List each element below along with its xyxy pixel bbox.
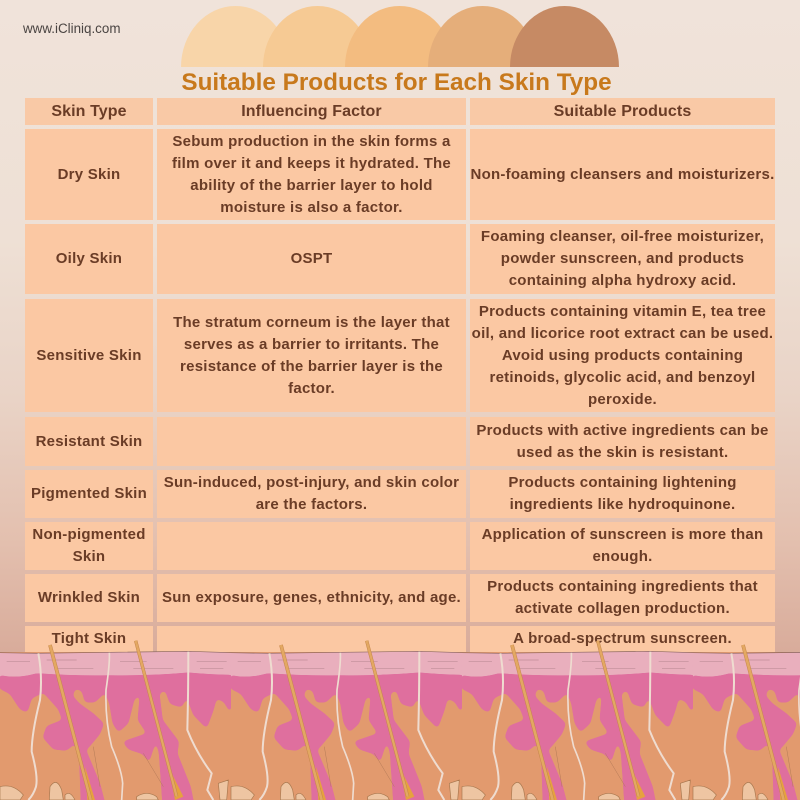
row: wrinkled skin type [25, 574, 153, 622]
row: tight skin type [25, 626, 153, 652]
row: sensitive skin factor [157, 299, 466, 412]
row: pigmented skin products: ingredients like hydroquinone. [510, 496, 735, 513]
row: pigmented skin factor [157, 470, 466, 518]
row: sensitive skin products: Avoid using products containing [502, 346, 743, 364]
row: sensitive skin factor: factor. [288, 380, 335, 396]
row: non-pigmented skin type [25, 522, 153, 570]
row: sensitive skin type: Sensitive Skin [36, 346, 142, 364]
header: influencing factor: Influencing Factor [241, 102, 382, 120]
row: non-pigmented skin products [470, 522, 775, 570]
row: pigmented skin products: Products containing lightening [508, 474, 737, 491]
row: wrinkled skin products: Products containing ingredients that [487, 578, 758, 595]
row: pigmented skin type [25, 470, 153, 518]
website label: www.iCliniq.com [23, 21, 120, 36]
row: dry skin factor [157, 129, 466, 220]
row: oily skin products: Foaming cleanser, oil-free moisturizer, [481, 228, 764, 245]
row: dry skin type [25, 129, 153, 220]
header: suitable products: Suitable Products [554, 102, 691, 120]
row: sensitive skin factor: serves as a barrier to irritants. The [184, 336, 439, 352]
row: dry skin factor: Sebum production in the skin forms a [172, 132, 451, 150]
row: oily skin products: powder sunscreen, and products [501, 250, 744, 267]
row: dry skin factor: film over it and keeps it hydrated. The [172, 154, 451, 172]
row: oily skin type [25, 224, 153, 294]
row: sensitive skin factor: The stratum corneum is the layer that [173, 314, 450, 330]
row: sensitive skin products: retinoids, glycolic acid, and benzoyl [490, 368, 755, 386]
skin cross-section illustration [0, 640, 800, 800]
row: sensitive skin products: oil, and licorice root extract can be used. [472, 324, 773, 342]
row: tight skin products: A broad-spectrum sunscreen. [513, 630, 732, 647]
row: sensitive skin factor: resistance of the barrier layer is the [180, 358, 443, 374]
row: wrinkled skin products [470, 574, 775, 622]
row: wrinkled skin factor: Sun exposure, genes, ethnicity, and age. [162, 589, 461, 606]
row: wrinkled skin products: activate collagen production. [515, 600, 730, 617]
row: oily skin factor: OSPT [291, 250, 332, 267]
row: non-pigmented skin type: Non-pigmented [32, 526, 146, 543]
row: pigmented skin type: Pigmented Skin [31, 485, 147, 502]
row: sensitive skin products [470, 299, 775, 412]
row: dry skin factor: moisture is also a factor. [220, 198, 403, 216]
row: resistant skin products [470, 417, 775, 466]
row: non-pigmented skin type: Skin [73, 548, 105, 565]
row: tight skin type: Tight Skin [52, 630, 126, 647]
row: pigmented skin products [470, 470, 775, 518]
row: oily skin type: Oily Skin [56, 250, 122, 267]
row: non-pigmented skin factor [157, 522, 466, 570]
header: suitable products [470, 98, 775, 125]
row: resistant skin type [25, 417, 153, 466]
row: resistant skin type: Resistant Skin [36, 432, 142, 450]
row: wrinkled skin factor [157, 574, 466, 622]
row: dry skin products [470, 129, 775, 220]
row: oily skin products: containing alpha hydroxy acid. [509, 272, 736, 289]
row: non-pigmented skin products: Application of sunscreen is more than [482, 526, 763, 543]
skin tone domes [181, 6, 619, 67]
row: dry skin products: Non-foaming cleansers and moisturizers. [470, 166, 774, 182]
row: sensitive skin type [25, 299, 153, 412]
row: non-pigmented skin products: enough. [592, 548, 653, 565]
title: Suitable Products for Each Skin Type [181, 69, 612, 96]
row: resistant skin products: used as the skin is resistant. [517, 444, 728, 460]
row: dry skin factor: ability of the barrier layer to hold [190, 176, 433, 194]
row: tight skin products [470, 626, 775, 652]
row: wrinkled skin type: Wrinkled Skin [38, 589, 140, 606]
row: pigmented skin factor: are the factors. [256, 496, 367, 513]
row: sensitive skin products: Products containing vitamin E, tea tree [479, 302, 766, 320]
row: resistant skin factor [157, 417, 466, 466]
row: pigmented skin factor: Sun-induced, post-injury, and skin color [164, 474, 459, 491]
row: tight skin factor [157, 626, 466, 652]
header: influencing factor [157, 98, 466, 125]
row: dry skin type: Dry Skin [58, 166, 120, 182]
row: sensitive skin products: peroxide. [588, 390, 657, 408]
skin tile repeats [0, 641, 800, 800]
table [25, 98, 775, 652]
row: oily skin factor [157, 224, 466, 294]
header: skin type: Skin Type [51, 102, 127, 120]
header: skin type [25, 98, 153, 125]
row: oily skin products [470, 224, 775, 294]
row: resistant skin products: Products with active ingredients can be [476, 422, 769, 438]
